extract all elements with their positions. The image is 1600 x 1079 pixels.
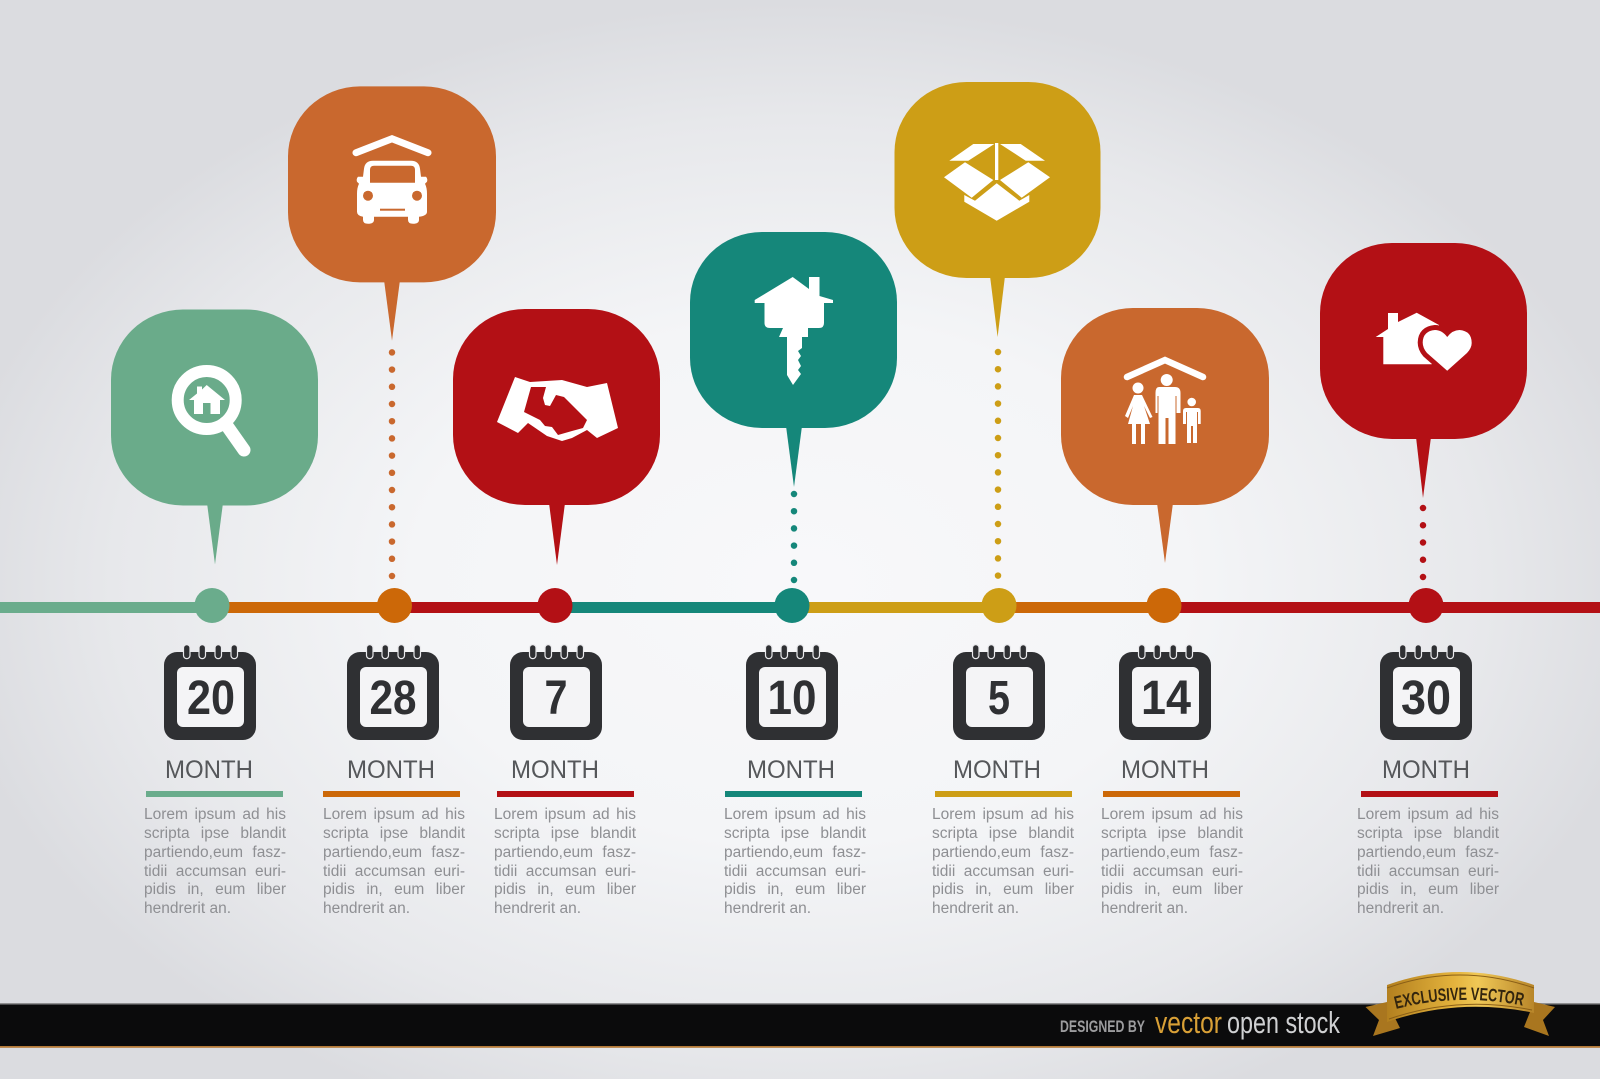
column: 10 month — [724, 644, 866, 917]
description: Lorem ipsum ad his — [494, 806, 636, 823]
calendar icon: 5 — [953, 644, 1045, 740]
description: Lorem ipsum ad his — [1101, 806, 1243, 823]
description: partiendo,eum fasz- — [724, 844, 866, 861]
colour rule — [323, 791, 460, 797]
column: 30 month — [1357, 645, 1499, 917]
icon: family under roof — [1125, 360, 1203, 444]
calendar icon: 10 — [746, 644, 838, 740]
calendar icon: 10: 10 — [768, 672, 816, 725]
calendar icon: 14 — [1119, 644, 1211, 740]
month label: MONTH — [511, 756, 599, 784]
description: hendrerit an. — [144, 900, 231, 917]
dotted connector: red — [1420, 508, 1426, 579]
colour rule — [1103, 791, 1240, 797]
colour rule — [1361, 791, 1498, 797]
description: Lorem ipsum ad his — [323, 806, 465, 823]
column: 7 month — [494, 644, 636, 917]
bubble: family home — [1061, 308, 1269, 563]
column: 5 month — [932, 644, 1074, 917]
description: tidii accumsan euri- — [932, 863, 1074, 880]
month label: MONTH — [347, 756, 435, 784]
icon: house-shaped key — [755, 277, 833, 385]
dotted connector: orange — [389, 352, 395, 577]
description: partiendo,eum fasz- — [323, 844, 465, 861]
colour rule — [725, 791, 862, 797]
description: hendrerit an. — [1101, 900, 1188, 917]
description: tidii accumsan euri- — [1101, 863, 1243, 880]
description: Lorem ipsum ad his — [724, 806, 866, 823]
description: tidii accumsan euri- — [1357, 863, 1499, 880]
description: scripta ipse blandit — [144, 825, 286, 842]
calendar icon: 20: 20 — [187, 672, 235, 725]
description: pidis in, eum liber — [932, 881, 1074, 898]
description — [494, 806, 636, 917]
description: pidis in, eum liber — [323, 881, 465, 898]
calendar icon: 20 — [164, 645, 256, 740]
dotted connector: teal — [791, 494, 797, 582]
description: scripta ipse blandit — [1101, 825, 1243, 842]
bubble: house key — [690, 232, 897, 487]
description — [144, 806, 286, 917]
bubble: open box — [894, 82, 1100, 337]
description: pidis in, eum liber — [724, 881, 866, 898]
dotted connector: gold — [995, 352, 1001, 576]
description: scripta ipse blandit — [932, 825, 1074, 842]
month label: MONTH — [1121, 756, 1209, 784]
description: scripta ipse blandit — [724, 825, 866, 842]
description: pidis in, eum liber — [1357, 881, 1499, 898]
icon: house and heart — [1376, 313, 1472, 371]
description: hendrerit an. — [932, 900, 1019, 917]
description: partiendo,eum fasz- — [1101, 844, 1243, 861]
description: scripta ipse blandit — [323, 825, 465, 842]
calendar icon: 14: 14 — [1141, 672, 1191, 725]
description: pidis in, eum liber — [1101, 881, 1243, 898]
column: 14 month — [1101, 644, 1243, 917]
footer band — [0, 1003, 1600, 1048]
month label: MONTH — [747, 756, 835, 784]
month label: MONTH — [953, 756, 1041, 784]
description: Lorem ipsum ad his — [144, 806, 286, 823]
description: hendrerit an. — [724, 900, 811, 917]
icon: open box — [944, 143, 1050, 221]
description: tidii accumsan euri- — [724, 863, 866, 880]
description: scripta ipse blandit — [494, 825, 636, 842]
credit: vector: vector — [1155, 1005, 1222, 1040]
description: Lorem ipsum ad his — [1357, 806, 1499, 823]
bubble: search home — [111, 310, 318, 564]
colour rule — [146, 791, 283, 797]
description: partiendo,eum fasz- — [932, 844, 1074, 861]
icon: handshake — [497, 377, 618, 441]
description: pidis in, eum liber — [494, 881, 636, 898]
description — [1101, 806, 1243, 917]
badge text: EXCLUSIVE VECTOR — [1394, 988, 1524, 1009]
calendar icon: 7: 7 — [544, 672, 568, 725]
bubble: handshake — [453, 309, 660, 565]
description: tidii accumsan euri- — [144, 863, 286, 880]
colour rule — [935, 791, 1072, 797]
description: scripta ipse blandit — [1357, 825, 1499, 842]
bubble: house with heart — [1320, 243, 1527, 498]
gold ribbon badge — [1366, 972, 1555, 1036]
description — [323, 806, 465, 917]
icon: car under roof — [356, 139, 428, 224]
timeline line — [0, 602, 1600, 613]
description: tidii accumsan euri- — [494, 863, 636, 880]
calendar icon: 7 — [510, 644, 602, 740]
calendar icon: 28 — [347, 644, 439, 740]
column: 28 month — [323, 644, 465, 917]
description — [932, 806, 1074, 917]
month label: MONTH — [165, 756, 253, 784]
calendar icon: 5: 5 — [988, 672, 1010, 725]
description: partiendo,eum fasz- — [1357, 844, 1499, 861]
description: partiendo,eum fasz- — [494, 844, 636, 861]
calendar icon: 30: 30 — [1401, 672, 1451, 725]
description: tidii accumsan euri- — [323, 863, 465, 880]
description: partiendo,eum fasz- — [144, 844, 286, 861]
timeline nodes — [194, 588, 1444, 623]
credit: open stock: open stock — [1227, 1005, 1340, 1040]
description: hendrerit an. — [323, 900, 410, 917]
description — [724, 806, 866, 917]
month label: MONTH — [1382, 756, 1470, 784]
description: Lorem ipsum ad his — [932, 806, 1074, 823]
credit: designed by: DESIGNED BY — [1060, 1017, 1145, 1036]
description: hendrerit an. — [494, 900, 581, 917]
column: 20 month — [144, 645, 286, 917]
description: hendrerit an. — [1357, 900, 1444, 917]
calendar icon: 28: 28 — [370, 672, 416, 725]
calendar icon: 30 — [1380, 645, 1472, 740]
description: pidis in, eum liber — [144, 881, 286, 898]
description — [1357, 806, 1499, 917]
bubble: car garage — [288, 86, 496, 341]
colour rule — [497, 791, 634, 797]
icon: magnifier with house — [178, 371, 244, 450]
